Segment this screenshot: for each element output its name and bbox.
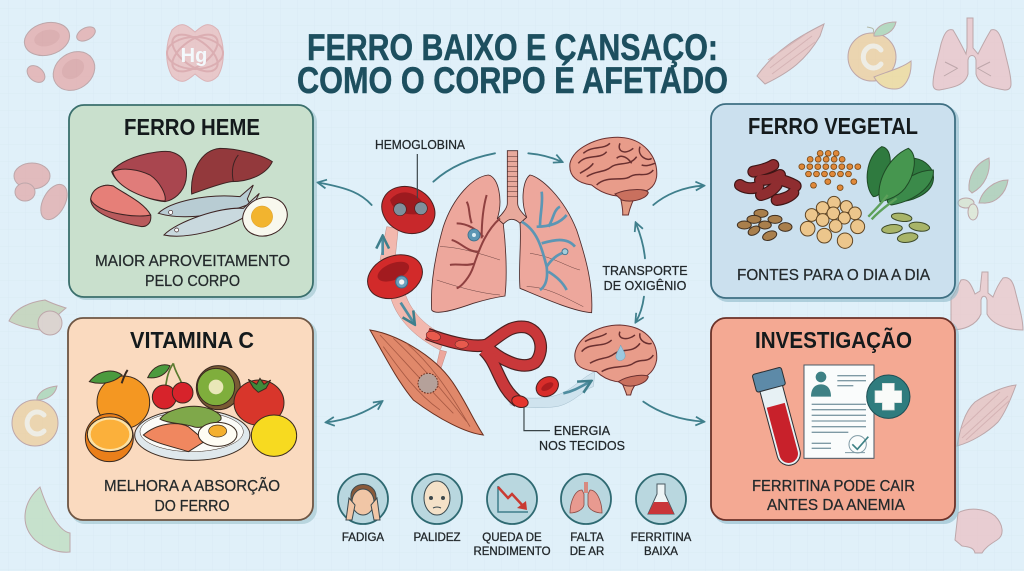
panel: investigação [711,318,959,524]
symptom: falta de ar [561,474,611,558]
title [297,27,728,101]
heading: ferro heme: FERRO HEME [124,114,260,140]
caption: MAIOR APROVEITAMENTO [95,253,290,270]
title: FERRO BAIXO E CANSAÇO: [307,27,718,68]
symptom: queda de rendimento [473,474,551,558]
icon: falling chart [487,474,537,524]
heading: ferro vegetal: FERRO VEGETAL [748,113,918,139]
icons: fruits and plate [85,363,297,462]
caption: RENDIMENTO [473,546,551,558]
icon: pale face [412,474,462,524]
title: COMO O CORPO É AFETADO [297,60,728,101]
central diagram: oxygen transport [319,137,703,435]
label: energia nos tecidos: NOS TECIDOS [539,439,625,453]
symptom: palidez [412,474,462,544]
caption [95,253,290,290]
caption: FONTES PARA O DIA A DIA [737,267,930,284]
caption: BAIXA [644,546,678,558]
muscle [370,330,483,435]
icon: lungs [561,474,611,524]
caption: MELHORA A ABSORÇÃO [104,475,280,495]
energy leader [524,407,550,431]
label: hemoglobina: HEMOGLOBINA [375,138,466,152]
icons: meat, liver, fish and egg [91,148,293,242]
caption: DO FERRO [154,498,230,515]
panel: vitamina c [68,318,317,524]
symptom: fadiga [338,474,388,544]
panel: ferro heme [69,105,317,300]
caption: PALIDEZ [413,532,461,544]
caption: FADIGA [342,532,384,544]
icon: tired face [338,474,388,524]
caption [752,478,915,514]
caption: FALTA [570,532,604,544]
caption: ANTES DA ANEMIA [767,497,905,514]
vessels and red blood cells [361,178,595,409]
decorative faded icons: Hg [181,45,207,67]
symptom: ferritina baixa [631,474,692,558]
caption: PELO CORPO [145,273,240,290]
icon: flask [636,474,686,524]
label: energia nos tecidos: ENERGIA [554,424,611,438]
caption: DE AR [570,546,604,558]
icons: beans, lentils, spinach, chickpeas, seeds [737,147,933,248]
hemoglobin leader [416,154,419,198]
brain bottom [575,325,657,395]
arrows [319,153,703,422]
caption [104,475,280,515]
icons: blood tube, report and plus [752,365,910,469]
panel: ferro vegetal [711,104,959,302]
caption: QUEDA DE [482,532,542,544]
caption: FERRITINA PODE CAIR [752,478,915,495]
heading: vitamina c: VITAMINA C [130,327,254,353]
label: transporte de oxigênio: TRANSPORTE [602,264,688,278]
brain top [570,137,657,215]
label: transporte de oxigênio: DE OXIGÊNIO [604,278,687,293]
lungs [431,151,592,313]
heading: investigação: INVESTIGAÇÃO [755,326,912,353]
caption: FERRITINA [631,532,692,544]
